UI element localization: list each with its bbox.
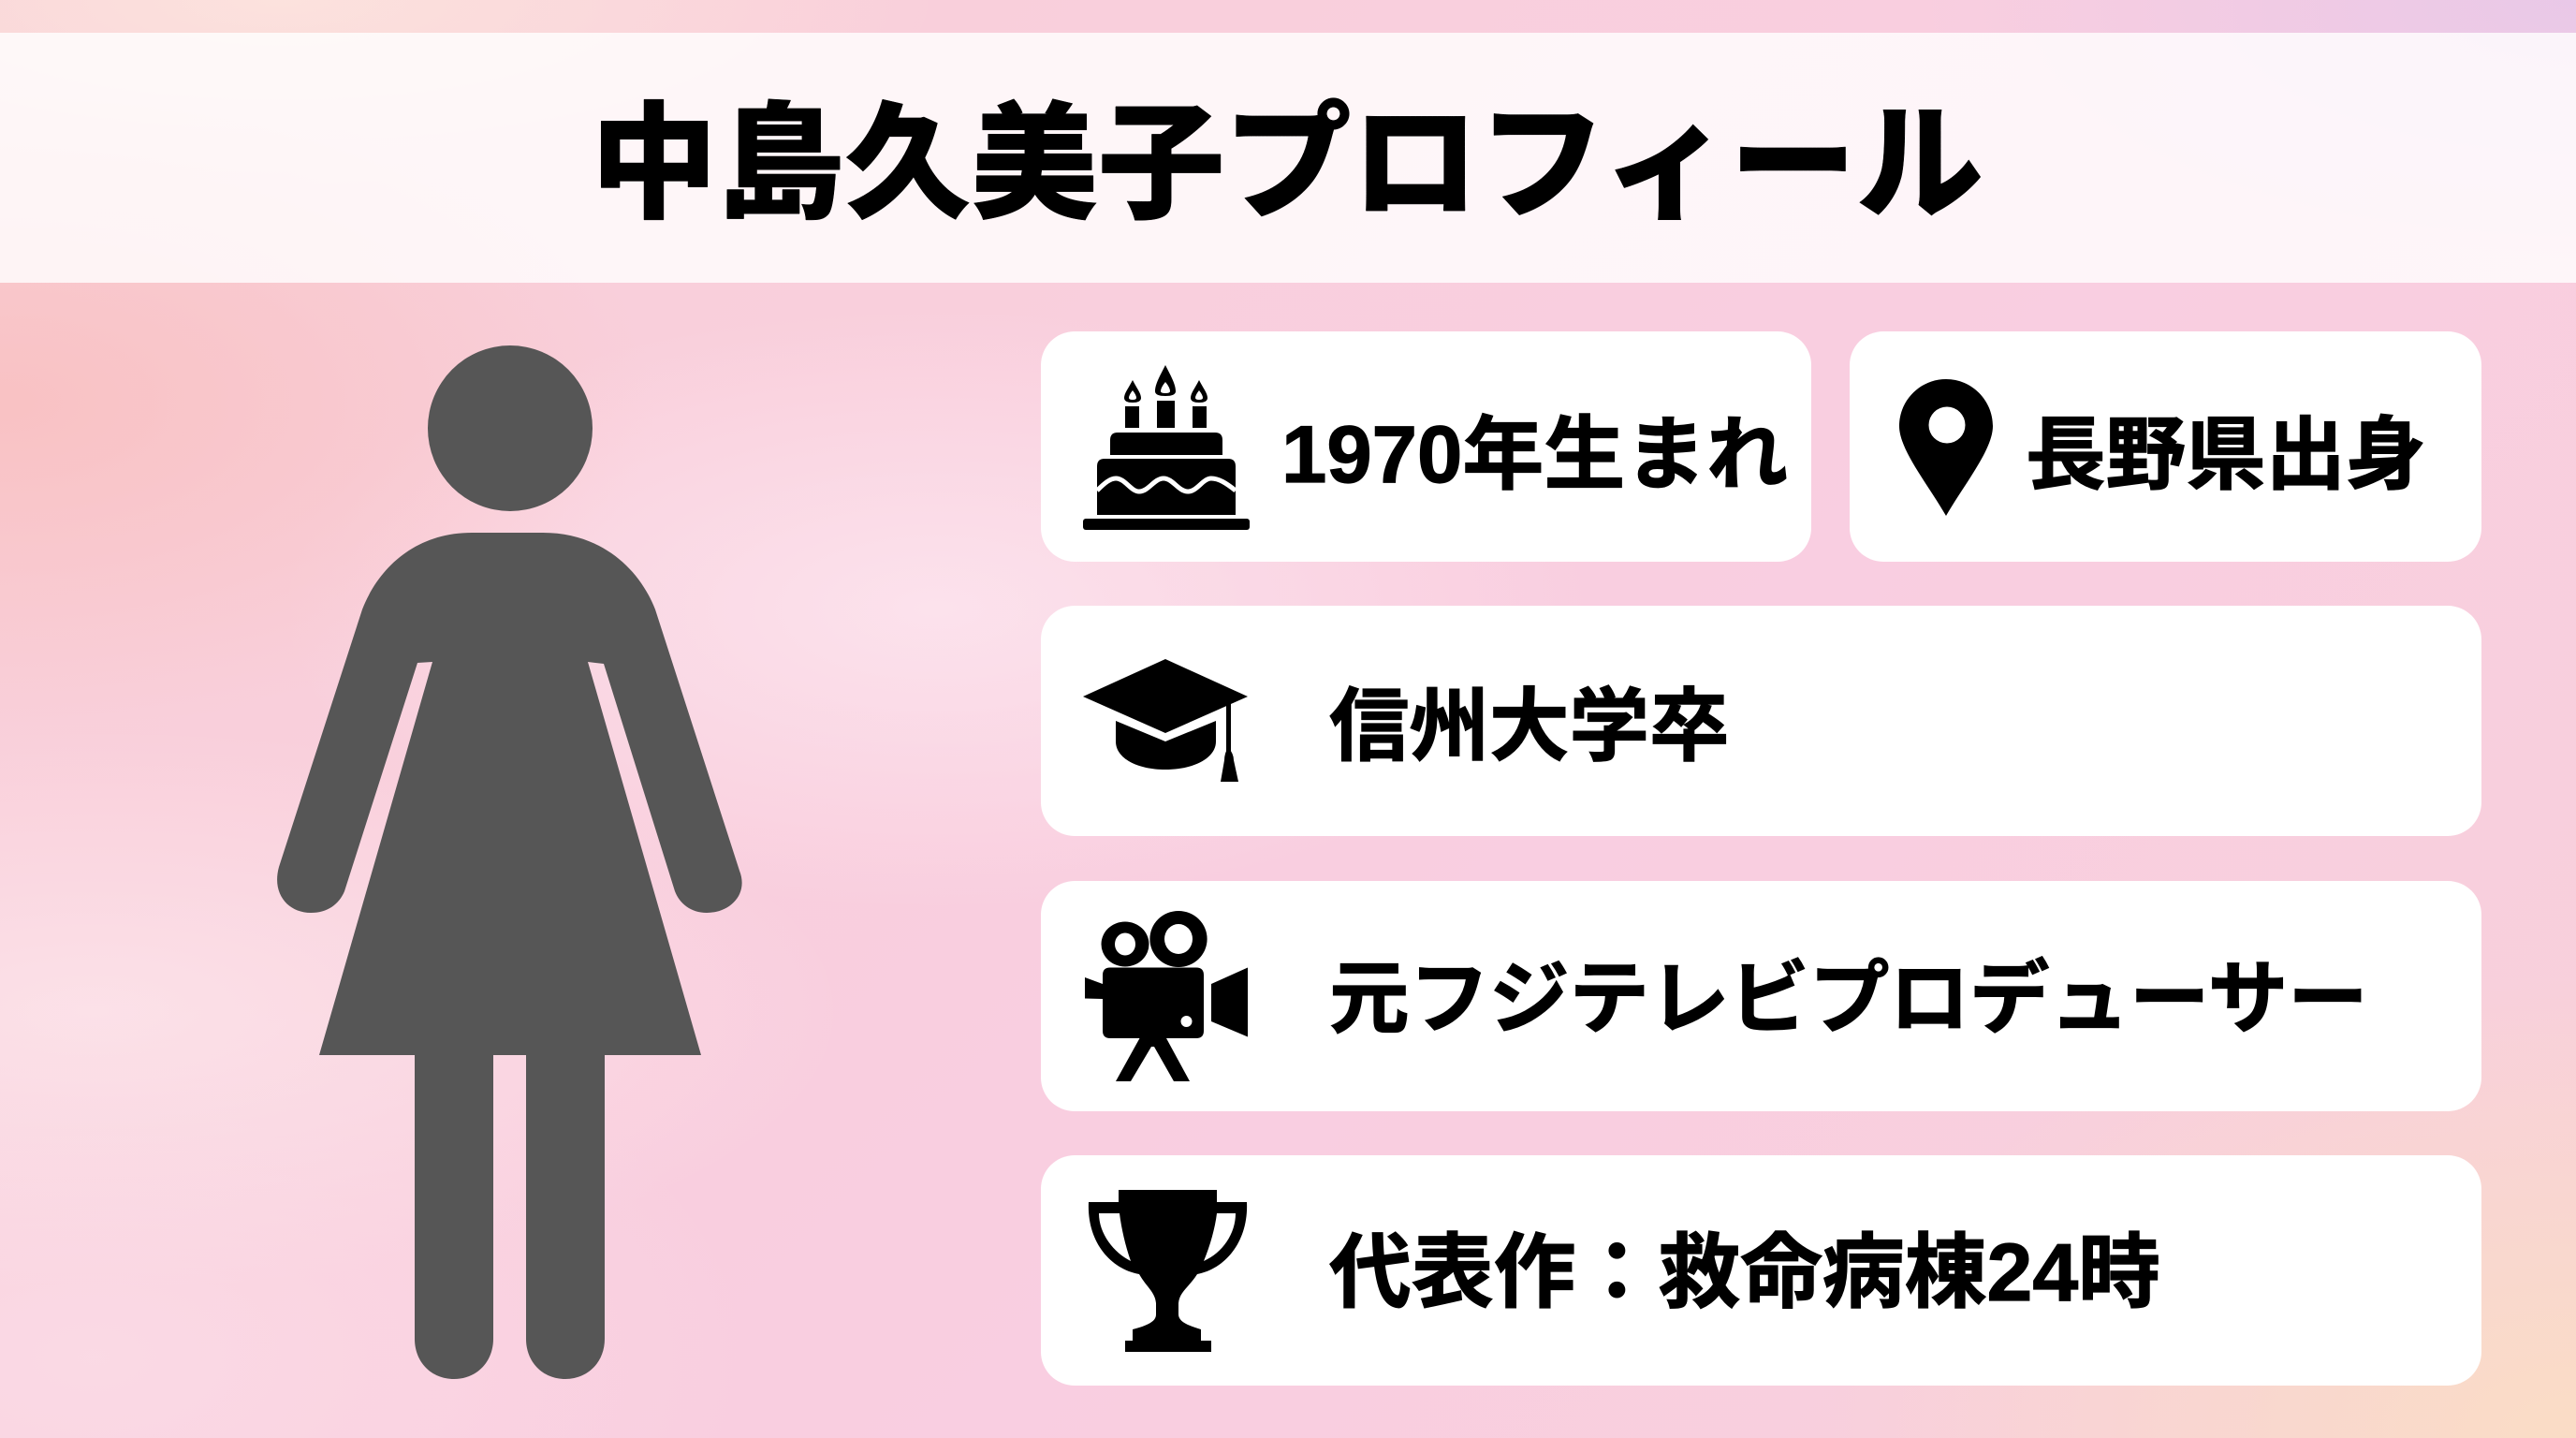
panel: education: [1041, 606, 2481, 836]
title: 中島久美子プロフィール: [591, 93, 1983, 235]
icon: graduation cap: [1083, 659, 1248, 782]
header band: [0, 33, 2576, 283]
panel: major work: [1041, 1155, 2481, 1386]
figure: woman silhouette: [277, 345, 742, 1379]
icon: birthday cake: [1083, 365, 1250, 530]
panel: birthplace: [1850, 331, 2481, 562]
text: education: 信州大学卒: [1329, 682, 1730, 771]
panel: career: [1041, 881, 2481, 1111]
panel: birth year: [1041, 331, 1811, 562]
icon: trophy: [1089, 1190, 1247, 1352]
text: major work: 代表作：救命病棟24時: [1329, 1227, 2160, 1318]
icon: movie camera: [1085, 911, 1248, 1081]
text: career: 元フジテレビプロデューサー: [1329, 955, 2368, 1044]
icon: map pin: [1899, 379, 1993, 516]
text: birthplace: 長野県出身: [2026, 411, 2426, 500]
text: birth year: 1970年生まれ: [1281, 410, 1788, 500]
